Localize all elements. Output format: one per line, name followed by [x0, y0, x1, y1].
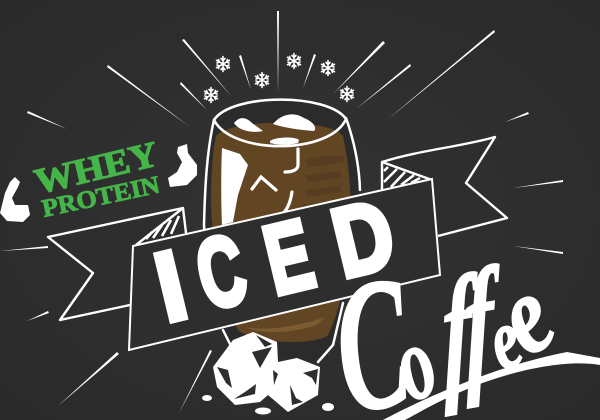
banner back: right ribbon: [382, 137, 507, 236]
title: ICED: I: [145, 230, 196, 343]
title: ICED: C: [187, 215, 256, 331]
whey text: WHEY: [31, 134, 162, 202]
glass rim: [214, 100, 346, 146]
glass outline: [204, 118, 360, 362]
whey protein label: [31, 134, 163, 223]
banner front: [129, 179, 440, 350]
coffee underline swash: [383, 352, 600, 420]
subtitle: Coffee: f: [439, 243, 482, 417]
snowflake icons: [204, 54, 354, 102]
icon: right flexed arm: [168, 144, 197, 187]
icon: left flexed arm: [0, 177, 30, 222]
banner back: left ribbon: [48, 208, 186, 320]
title: ICED: D: [322, 178, 404, 298]
subtitle: Coffee: e: [475, 290, 534, 389]
glass highlight: [221, 148, 248, 225]
title: ICED: [145, 178, 404, 343]
protein text: PROTEIN: [39, 170, 163, 223]
ice in glass: [234, 114, 315, 145]
subtitle: Coffee: [323, 235, 575, 420]
subtitle: Coffee: f: [461, 235, 504, 409]
iced coffee glass: [204, 100, 360, 362]
coffee: [211, 122, 351, 342]
ice cubes: [202, 332, 334, 414]
title: ICED: E: [254, 198, 323, 315]
subtitle: Coffee: e: [475, 253, 575, 379]
